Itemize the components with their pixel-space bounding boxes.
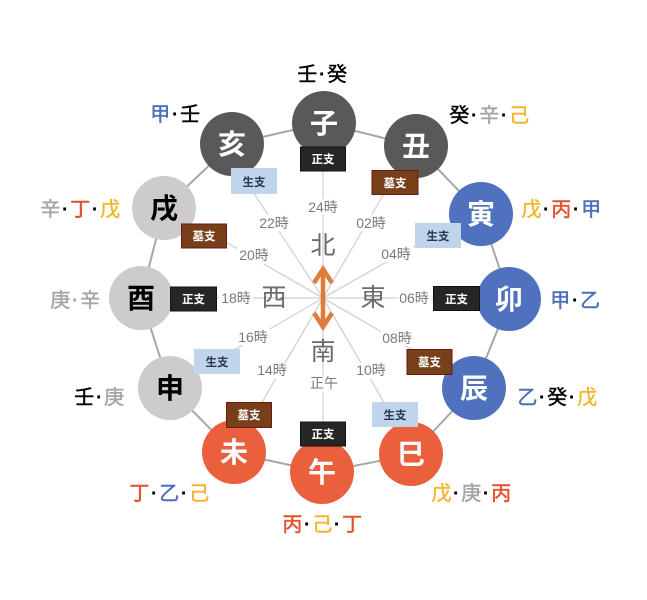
hour labels: 22時 <box>259 215 289 231</box>
tag: 墓支 lower left: 墓支 <box>238 408 261 422</box>
tag: 正支 left: 正支 <box>182 292 205 306</box>
tag: 正支 right: 正支 <box>445 292 468 306</box>
spokes <box>172 170 435 424</box>
stems: 未: 丁·乙·己 <box>129 483 211 505</box>
branch circle: 卯 <box>477 267 541 331</box>
tag: 生支 upper left <box>231 168 277 194</box>
tag: 墓支 upper left <box>182 224 226 248</box>
stems: 申: 壬·庚 <box>74 386 126 409</box>
hour labels: 10時 <box>356 362 386 378</box>
branch circle: 寅: 寅 <box>467 199 495 230</box>
branch circle: 戌: 戌 <box>150 193 178 224</box>
tag: 墓支 lower right: 墓支 <box>418 355 441 369</box>
stems: 酉: 庚·辛 <box>50 289 102 312</box>
stems: 午: 丙·己·丁 <box>282 514 364 536</box>
tag: 生支 upper left: 生支 <box>242 175 266 189</box>
tag: 正支 bottom <box>300 422 346 446</box>
direction: 西: 西 <box>261 284 287 312</box>
tag: 墓支 lower right <box>407 350 452 374</box>
stems: 寅: 戊·丙·甲 <box>521 198 603 221</box>
stems: 戌: 辛·丁·戊 <box>40 198 122 221</box>
tag: 墓支 upper right: 墓支 <box>384 176 407 190</box>
stems: 巳: 戊·庚·丙 <box>431 482 513 505</box>
branch circle: 巳: 巳 <box>397 439 425 470</box>
branch circle: 申: 申 <box>156 373 184 404</box>
stems: 辰: 乙·癸·戊 <box>517 386 599 409</box>
hour labels <box>219 199 432 392</box>
direction: 東: 東 <box>360 284 386 312</box>
tag: 生支 lower right: 生支 <box>384 408 407 422</box>
hour labels: 24時 <box>308 199 338 215</box>
stems: 卯: 甲·乙 <box>550 290 602 312</box>
branch circle: 午 <box>290 440 354 504</box>
branch circle: 丑 <box>384 114 448 178</box>
hour labels: 正午 <box>310 375 338 391</box>
branch circle: 酉: 酉 <box>127 283 155 314</box>
hour labels: 16時 <box>238 329 268 345</box>
branch circle: 子 <box>292 91 356 155</box>
outer ring connecting the branches <box>141 123 510 472</box>
branch circle: 巳 <box>379 422 443 486</box>
tag: 墓支 upper left: 墓支 <box>192 229 216 243</box>
branch circle: 亥: 亥 <box>218 129 246 160</box>
hour labels: 20時 <box>239 247 269 263</box>
tag: 生支 upper right <box>415 223 461 248</box>
tag: 生支 lower left: 生支 <box>206 355 229 369</box>
branch circle: 寅 <box>449 182 513 246</box>
branch circle: 辰: 辰 <box>460 373 488 404</box>
tag: 墓支 upper right <box>372 170 418 194</box>
stems: 丑: 癸·辛·己 <box>449 104 531 127</box>
branch circle: 戌 <box>132 176 196 240</box>
tag: 正支 bottom: 正支 <box>312 427 335 441</box>
tag: 正支 right <box>434 286 480 310</box>
hour labels: 04時 <box>381 246 411 262</box>
arrow: north-south <box>314 269 332 327</box>
tag: 正支 top: 正支 <box>312 152 335 166</box>
hour labels: 14時 <box>257 362 287 378</box>
branch circle: 未 <box>202 420 266 484</box>
tag: 正支 left <box>170 287 216 311</box>
branch circle: 辰 <box>442 356 506 420</box>
tag: 生支 lower right <box>372 402 418 427</box>
hour labels: 08時 <box>382 330 412 346</box>
branch circle: 丑: 丑 <box>402 131 430 162</box>
stems: 子: 壬·癸 <box>297 63 349 86</box>
hour labels: 18時 <box>221 290 251 306</box>
direction: 北: 北 <box>310 232 336 260</box>
direction: 南: 南 <box>310 338 336 366</box>
tag: 生支 upper right: 生支 <box>426 229 450 243</box>
tag: 正支 top <box>300 147 346 171</box>
branch circle: 未: 未 <box>220 437 248 468</box>
branch circle: 亥 <box>200 112 264 176</box>
hour labels: 06時 <box>399 290 429 306</box>
branch circle: 酉 <box>109 266 173 330</box>
branch circle: 子: 子 <box>310 108 338 139</box>
branch circle: 申 <box>138 356 202 420</box>
tag: 墓支 lower left <box>226 402 272 428</box>
branch circle: 午: 午 <box>308 457 336 488</box>
hour labels: 02時 <box>356 215 386 231</box>
tag: 生支 lower left <box>194 349 240 374</box>
stems: 亥: 甲·壬 <box>150 103 202 126</box>
branch circle: 卯: 卯 <box>495 284 523 315</box>
